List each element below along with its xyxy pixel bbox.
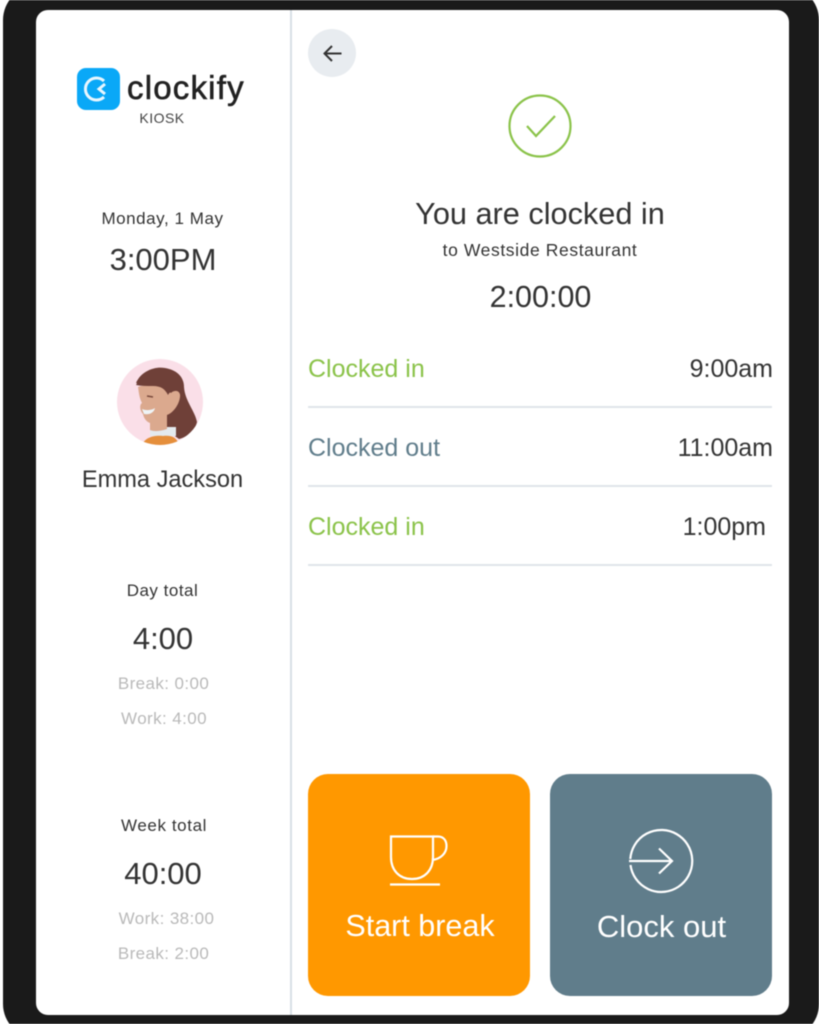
row: clocked in 1:00pm [308, 513, 766, 541]
location: to Westside Restaurant [443, 240, 637, 260]
eye and brow [147, 396, 153, 397]
week break: Break: 2:00 [118, 944, 209, 963]
status heading: You are clocked in [415, 196, 665, 231]
icon: clockify logo [76, 67, 121, 111]
label: Clocked in [308, 355, 425, 383]
current time: 3:00PM [110, 242, 216, 277]
panel: sidebar [76, 67, 245, 963]
back hair [136, 368, 197, 439]
time: 11:00am [678, 434, 773, 462]
day total value: 4:00 [133, 621, 193, 656]
icon: success check [508, 94, 572, 158]
button: clock out [550, 774, 772, 996]
day total label: Day total [127, 581, 198, 600]
icon: clock out arrow [628, 828, 694, 894]
row: clocked out 11:00am [308, 434, 773, 462]
label: Start break [345, 909, 495, 943]
mouth [142, 408, 155, 414]
face and neck [138, 385, 180, 431]
icon: coffee cup [389, 834, 448, 886]
avatar [116, 358, 204, 446]
kiosk label: KIOSK [139, 110, 185, 126]
fringe [136, 382, 170, 396]
date: Monday, 1 May [101, 209, 224, 228]
button: start break [308, 774, 530, 996]
label: Clocked out [308, 434, 440, 462]
week total value: 40:00 [124, 856, 202, 891]
day break: Break: 0:00 [118, 674, 209, 693]
week work: Work: 38:00 [119, 909, 214, 928]
logo wordmark: clockify [127, 69, 245, 106]
icon: back arrow button [308, 29, 356, 77]
week total label: Week total [121, 816, 207, 835]
label: Clocked in [308, 513, 425, 541]
day work: Work: 4:00 [121, 709, 207, 728]
collar and shirt [150, 427, 176, 436]
row: clocked in 9:00am [308, 355, 773, 383]
label: Clock out [597, 908, 726, 944]
divider between sidebar and main [290, 10, 292, 1015]
time: 1:00pm [683, 513, 766, 541]
time: 9:00am [690, 355, 773, 383]
employee name: Emma Jackson [82, 467, 243, 493]
elapsed timer: 2:00:00 [490, 280, 591, 314]
